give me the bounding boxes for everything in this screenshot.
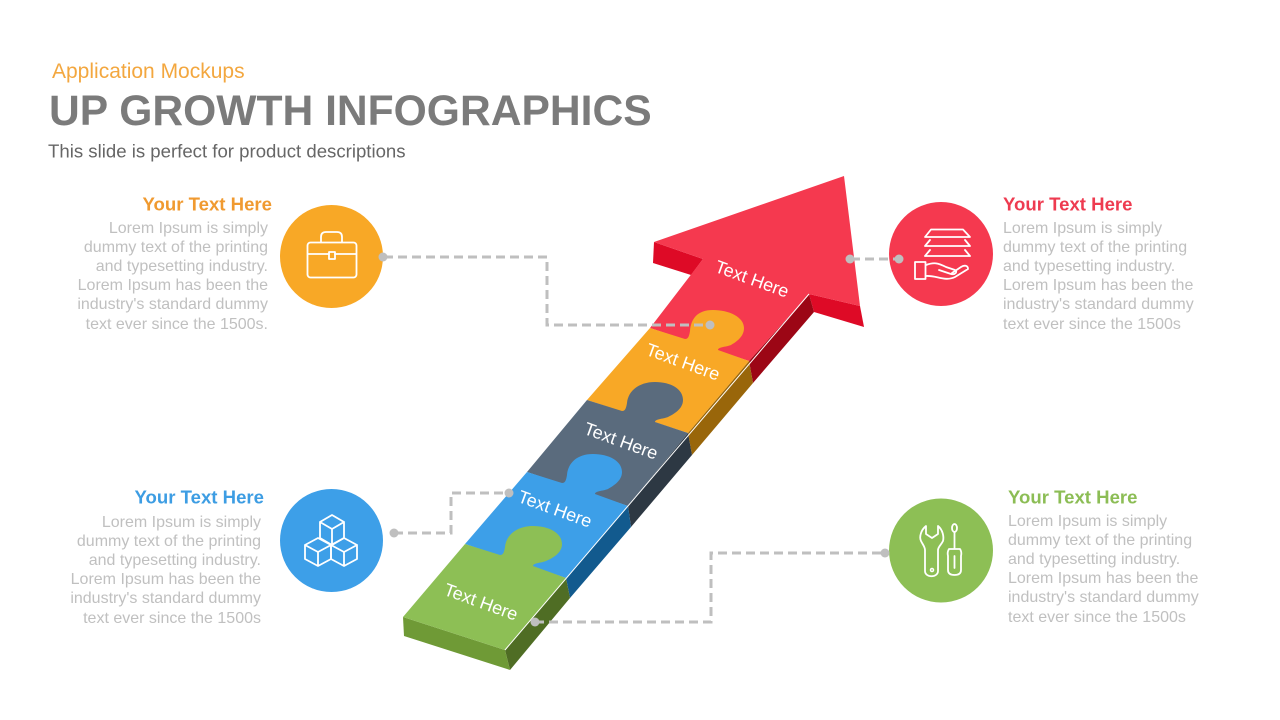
orange puzzle piece: [587, 310, 749, 433]
body: dummy text of the printing: [84, 239, 268, 256]
blue puzzle piece: [465, 454, 628, 578]
green piece label: Text Here: [441, 579, 521, 625]
body: and typesetting industry.: [96, 258, 268, 275]
body: and typesetting industry.: [1003, 258, 1175, 275]
body: text ever since the 1500s: [1008, 609, 1186, 626]
body: text ever since the 1500s: [1003, 316, 1181, 333]
text block: green: [1008, 486, 1199, 626]
body: industry's standard dummy: [77, 296, 268, 313]
connector: red: [846, 254, 904, 264]
body: [70, 514, 261, 627]
red arrowhead piece: [650, 176, 860, 361]
body: dummy text of the printing: [77, 533, 261, 550]
body: and typesetting industry.: [1008, 551, 1180, 568]
arrow side faces: [403, 242, 864, 670]
arrow infographic: [403, 176, 864, 670]
header: [48, 60, 652, 162]
body: industry's standard dummy: [1008, 589, 1199, 606]
body: Lorem Ipsum is simply: [1008, 513, 1167, 530]
icon: wrench and screwdriver: [889, 498, 993, 602]
green puzzle piece: [403, 526, 566, 650]
icon: cubes: [280, 489, 383, 592]
connector: orange: [378, 252, 714, 330]
body: industry's standard dummy: [70, 590, 261, 607]
blue piece label: Text Here: [515, 486, 595, 532]
body: text ever since the 1500s: [83, 610, 261, 627]
body: dummy text of the printing: [1003, 239, 1187, 256]
connector: blue: [390, 488, 514, 538]
title: UP GROWTH INFOGRAPHICS: [49, 87, 652, 135]
connector: green: [530, 548, 890, 626]
body: Lorem Ipsum has been the: [1003, 277, 1193, 294]
body: Lorem Ipsum is simply: [1003, 220, 1162, 237]
body: Lorem Ipsum has been the: [1008, 570, 1198, 587]
body: and typesetting industry.: [89, 552, 261, 569]
text block: blue: [70, 486, 264, 627]
grey puzzle piece: [527, 382, 688, 506]
eyebrow: Application Mockups: [52, 60, 245, 83]
body: dummy text of the printing: [1008, 532, 1192, 549]
body: [1003, 220, 1194, 333]
body: [1008, 513, 1199, 626]
body: Lorem Ipsum is simply: [109, 220, 268, 237]
subtitle: This slide is perfect for product descriptions: [48, 140, 406, 162]
heading: Your Text Here: [1008, 486, 1138, 508]
body: [77, 220, 268, 333]
body: Lorem Ipsum has been the: [71, 571, 261, 588]
red piece label: Text Here: [712, 256, 792, 302]
heading: Your Text Here: [134, 486, 264, 508]
body: text ever since the 1500s.: [86, 316, 268, 333]
icon: briefcase: [280, 205, 383, 308]
body: industry's standard dummy: [1003, 296, 1194, 313]
orange piece label: Text Here: [643, 339, 723, 385]
body: Lorem Ipsum is simply: [102, 514, 261, 531]
body: Lorem Ipsum has been the: [78, 277, 268, 294]
icon: layers in hand: [889, 202, 993, 306]
heading: Your Text Here: [1003, 194, 1133, 214]
text block: red: [1003, 194, 1194, 333]
text block: orange: [77, 194, 272, 333]
grey piece label: Text Here: [581, 418, 661, 464]
heading: Your Text Here: [142, 194, 272, 214]
edge highlight: [505, 294, 809, 650]
